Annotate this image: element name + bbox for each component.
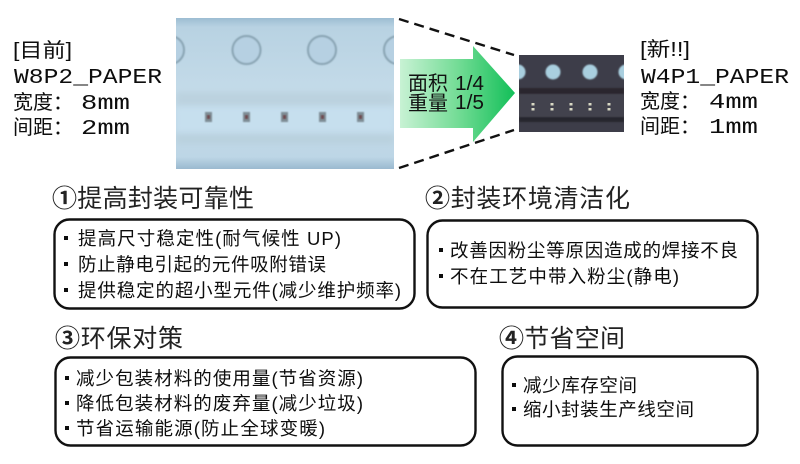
panel 3: environmental measures: 降低包装材料的废弃量(减少垃圾): [76, 393, 363, 414]
panel 3: environmental measures: 节省运输能源(防止全球变暖): [76, 418, 325, 439]
panel 1: reliability: 提供稳定的超小型元件(减少维护频率): [78, 280, 401, 301]
arrow: area and weight reduction: 1/5: [455, 92, 484, 114]
panel 3: environmental measures: [56, 358, 476, 446]
panel 1: reliability: 防止静电引起的元件吸附错误: [78, 254, 326, 275]
panel 2: clean environment: 改善因粉尘等原因造成的焊接不良: [450, 240, 738, 261]
photo: new 4mm paper tape: [519, 55, 624, 132]
new tape specification text: W4P1_PAPER: [641, 67, 789, 90]
panel 4: space saving: [502, 356, 758, 446]
new tape specification text: [新!!]: [640, 38, 690, 61]
current tape specification text: W8P2_PAPER: [14, 67, 162, 90]
arrow: area and weight reduction: 重量: [408, 92, 448, 115]
new tape specification text: 宽度：: [640, 90, 700, 113]
heading 3: ③环保对策: [55, 325, 183, 353]
new tape specification text: [640, 38, 789, 140]
current tape specification text: [目前]: [13, 39, 72, 62]
new tape specification text: 1mm: [709, 117, 758, 140]
arrow: area and weight reduction: 1/4: [455, 73, 484, 95]
current tape specification text: 2mm: [81, 118, 130, 141]
arrow: area and weight reduction: [400, 46, 515, 142]
heading 2: ②封装环境清洁化: [425, 185, 630, 213]
panel 4: space saving: 缩小封装生产线空间: [523, 399, 694, 420]
heading 4: ④节省空间: [499, 325, 625, 353]
heading 1: ①提高封装可靠性: [52, 185, 254, 213]
new tape specification text: 间距：: [640, 115, 700, 138]
panel 1: reliability: [54, 220, 414, 308]
panel 4: space saving: 减少库存空间: [523, 375, 637, 396]
panel 2: clean environment: 不在工艺中带入粉尘(静电): [450, 266, 679, 287]
panel 2: clean environment: [428, 220, 758, 308]
new tape specification text: 4mm: [709, 92, 758, 115]
panel 3: environmental measures: 减少包装材料的使用量(节省资源): [76, 368, 363, 389]
current tape specification text: 间距：: [13, 116, 73, 139]
current tape specification text: 宽度：: [13, 91, 73, 114]
dashed zoom lines: [399, 19, 514, 168]
photo: current 8mm paper tape: [176, 18, 394, 169]
arrow: area and weight reduction: 面积: [408, 72, 448, 95]
current tape specification text: [13, 39, 162, 141]
current tape specification text: 8mm: [81, 93, 130, 116]
panel 1: reliability: 提高尺寸稳定性(耐气候性 UP): [78, 228, 341, 249]
